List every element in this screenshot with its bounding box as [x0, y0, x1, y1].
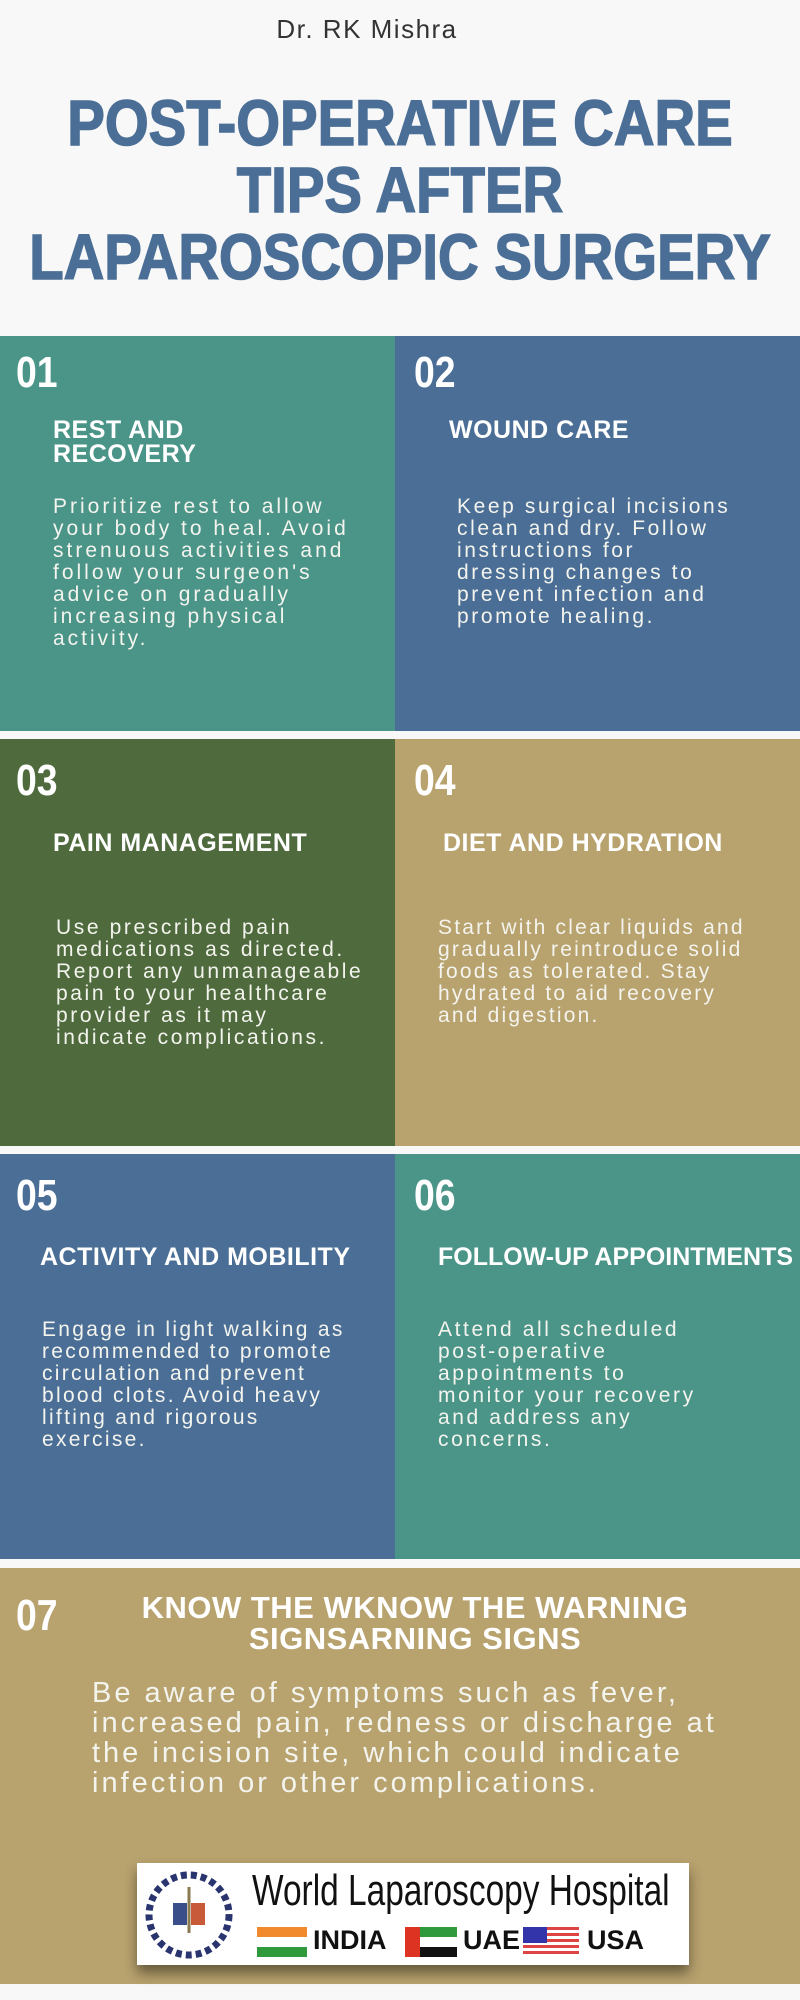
panel: 04 diet and hydration: 04 — [414, 756, 456, 805]
panel: 01 rest and recovery: increasing physical — [53, 605, 287, 628]
panel: 03 pain management: pain to your healthcare — [56, 982, 329, 1005]
panel: 03 pain management — [0, 739, 395, 1146]
panel: 07 warning signs — [0, 1568, 800, 1984]
panel: 04 diet and hydration: gradually reintroduce solid — [438, 938, 743, 961]
panel: 06 follow-up appointments: and address any — [438, 1406, 632, 1429]
title — [29, 87, 771, 293]
panel: 05 activity and mobility: circulation and prevent — [42, 1362, 306, 1385]
panel: 06 follow-up appointments: 06 — [414, 1171, 456, 1220]
panel: 04 diet and hydration: foods as tolerated. Stay — [438, 960, 711, 983]
panel: 02 wound care: promote healing. — [457, 605, 655, 628]
panel: 04 diet and hydration — [395, 739, 800, 1146]
panel: 01 rest and recovery: Prioritize rest to allow — [53, 495, 325, 518]
panel: 07 warning signs: SIGNSARNING SIGNS — [249, 1621, 581, 1656]
panel: 06 follow-up appointments: Attend all scheduled — [438, 1318, 679, 1341]
panel: 04 diet and hydration: DIET AND HYDRATION — [443, 829, 723, 857]
panel: 06 follow-up appointments: concerns. — [438, 1428, 552, 1451]
panel: 02 wound care: clean and dry. Follow — [457, 517, 708, 540]
panel: 02 wound care: prevent infection and — [457, 583, 707, 606]
title: POST-OPERATIVE CARE — [67, 87, 733, 159]
panel: 01 rest and recovery: strenuous activities and — [53, 539, 344, 562]
panel: 07 warning signs: increased pain, redness or discharge at — [92, 1707, 717, 1739]
panel: 01 rest and recovery: RECOVERY — [53, 440, 196, 468]
panel: 01 rest and recovery: activity. — [53, 627, 148, 650]
panel: 04 diet and hydration: and digestion. — [438, 1004, 600, 1027]
author: Dr. RK Mishra — [276, 14, 458, 44]
panel: 05 activity and mobility: Engage in light walking as — [42, 1318, 345, 1341]
panel: 07 warning signs: infection or other complications. — [92, 1767, 599, 1799]
panel: 01 rest and recovery: follow your surgeon's — [53, 561, 313, 584]
panel: 01 rest and recovery — [0, 336, 395, 731]
panel: 05 activity and mobility: recommended to promote — [42, 1340, 333, 1363]
flags: UAE — [463, 1925, 520, 1955]
panel: 06 follow-up appointments: appointments to — [438, 1362, 626, 1385]
panel: 05 activity and mobility: exercise. — [42, 1428, 147, 1451]
panel: 01 rest and recovery: your body to heal. Avoid — [53, 517, 349, 540]
panel: 03 pain management: Report any unmanageable — [56, 960, 363, 983]
panel: 03 pain management: Use prescribed pain — [56, 916, 292, 939]
flags: USA — [587, 1925, 644, 1955]
panel: 01 rest and recovery: REST AND — [53, 416, 184, 444]
panel: 04 diet and hydration: Start with clear liquids and — [438, 916, 745, 939]
panel: 03 pain management: provider as it may — [56, 1004, 269, 1027]
flags — [257, 1925, 644, 1957]
panel: 02 wound care: WOUND CARE — [449, 416, 629, 444]
panel: 06 follow-up appointments — [395, 1154, 800, 1559]
panel: 05 activity and mobility: blood clots. Avoid heavy — [42, 1384, 322, 1407]
panel: 01 rest and recovery: 01 — [16, 348, 58, 397]
panel: 05 activity and mobility: ACTIVITY AND MOBILITY — [40, 1243, 350, 1271]
panel: 01 rest and recovery: advice on gradually — [53, 583, 291, 606]
panel: 07 warning signs: 07 — [16, 1591, 58, 1640]
panel: 05 activity and mobility: lifting and rigorous — [42, 1406, 260, 1429]
panel: 06 follow-up appointments: post-operative — [438, 1340, 607, 1363]
panel: 05 activity and mobility — [0, 1154, 395, 1559]
panel: 02 wound care: Keep surgical incisions — [457, 495, 730, 518]
icon: wreath emblem — [146, 1872, 232, 1958]
panel: 07 warning signs: Be aware of symptoms such as fever, — [92, 1677, 679, 1709]
panel: 07 warning signs: the incision site, which could indicate — [92, 1737, 683, 1769]
panel: 02 wound care: 02 — [414, 348, 456, 397]
logo text: World Laparoscopy Hospital — [252, 1866, 670, 1915]
panel: 06 follow-up appointments: monitor your recovery — [438, 1384, 696, 1407]
panel: 03 pain management: PAIN MANAGEMENT — [53, 829, 307, 857]
panel: 02 wound care — [395, 336, 800, 731]
panel: 06 follow-up appointments: FOLLOW-UP APPOINTMENTS — [438, 1243, 793, 1271]
panel: 03 pain management: indicate complications. — [56, 1026, 327, 1049]
flags: INDIA — [313, 1925, 386, 1955]
panel: 02 wound care: instructions for — [457, 539, 635, 562]
panel: 03 pain management: medications as directed. — [56, 938, 345, 961]
logo — [137, 1863, 689, 1965]
panel: 07 warning signs: KNOW THE WKNOW THE WARNING — [142, 1590, 688, 1625]
panel: 04 diet and hydration: hydrated to aid recovery — [438, 982, 716, 1005]
panel: 03 pain management: 03 — [16, 756, 58, 805]
title: LAPAROSCOPIC SURGERY — [29, 221, 771, 293]
panel: 05 activity and mobility: 05 — [16, 1171, 58, 1220]
title: TIPS AFTER — [237, 154, 563, 226]
panel: 02 wound care: dressing changes to — [457, 561, 694, 584]
